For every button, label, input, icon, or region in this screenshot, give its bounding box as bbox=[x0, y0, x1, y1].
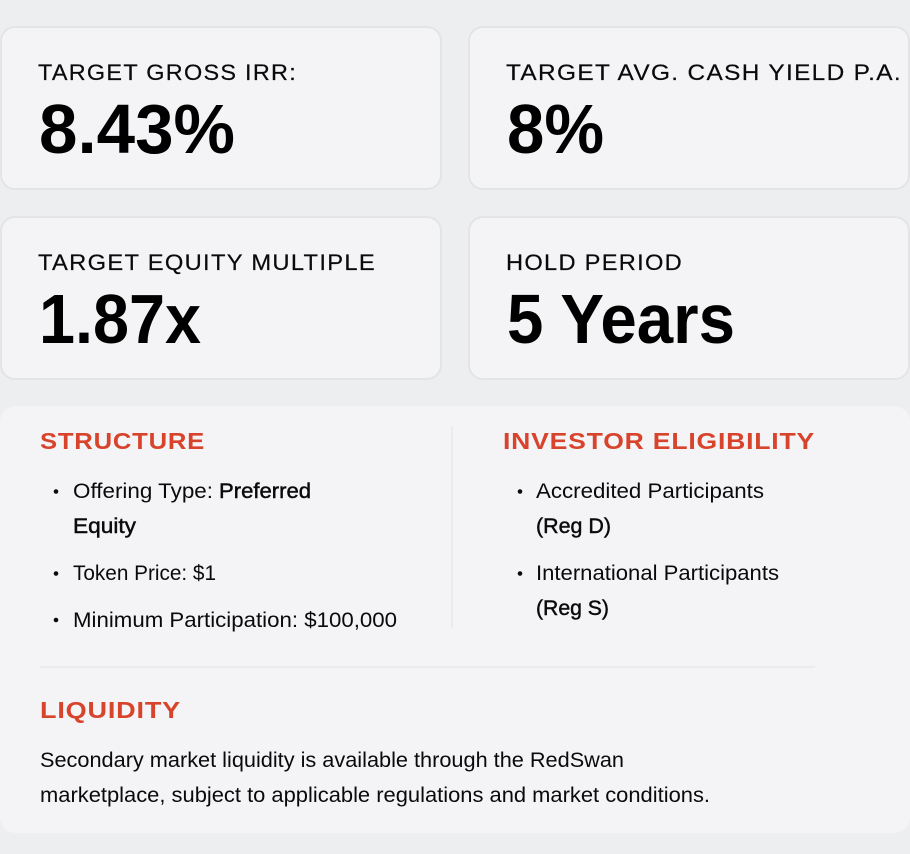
section: structure bbox=[40, 428, 397, 632]
panel: offering details bbox=[0, 406, 910, 833]
text: liquidity description: marketplace, subject to applicable regulations and market conditions. bbox=[40, 784, 710, 807]
list item: international participants: International Participants bbox=[536, 562, 779, 585]
text: liquidity description: Secondary market liquidity is available through the RedSwan bbox=[40, 749, 624, 772]
list item: offering type bbox=[54, 480, 311, 538]
section: liquidity bbox=[40, 697, 710, 807]
value: 5 Years: 5 Years bbox=[507, 280, 735, 358]
list item: token price: Token Price: $1 bbox=[73, 562, 216, 585]
label: target equity multiple: TARGET EQUITY MULTIPLE bbox=[38, 250, 376, 275]
value: 1.87x: 1.87x bbox=[39, 280, 201, 358]
card: target equity multiple bbox=[1, 217, 441, 379]
label: target average cash yield: TARGET AVG. CASH YIELD P.A. bbox=[506, 60, 902, 85]
list item: accredited participants bbox=[518, 480, 764, 538]
section: investor eligibility bbox=[503, 428, 815, 620]
label: target gross IRR: TARGET GROSS IRR: bbox=[38, 60, 297, 85]
card: target gross IRR bbox=[1, 27, 441, 189]
card: target average cash yield bbox=[469, 27, 909, 189]
list item: minimum participation: Minimum Participation: $100,000 bbox=[73, 609, 397, 632]
list item: offering type: Equity bbox=[73, 515, 137, 538]
list item: international participants: (Reg S) bbox=[536, 597, 609, 620]
list item: accredited participants: Accredited Participants bbox=[536, 480, 764, 503]
list item: international participants bbox=[518, 562, 779, 620]
text: liquidity description bbox=[40, 749, 710, 807]
label: hold period: HOLD PERIOD bbox=[506, 250, 683, 275]
heading: structure: STRUCTURE bbox=[40, 428, 205, 454]
value: 8%: 8% bbox=[507, 90, 604, 168]
list item: offering type: Offering Type: bbox=[73, 480, 213, 503]
list item: accredited participants: (Reg D) bbox=[536, 515, 611, 538]
card: hold period bbox=[469, 217, 909, 379]
value: 8.43%: 8.43% bbox=[39, 90, 235, 168]
heading: liquidity: LIQUIDITY bbox=[40, 697, 181, 723]
list item: offering type: Preferred bbox=[219, 480, 311, 503]
heading: investor eligibility: INVESTOR ELIGIBILITY bbox=[503, 428, 815, 454]
